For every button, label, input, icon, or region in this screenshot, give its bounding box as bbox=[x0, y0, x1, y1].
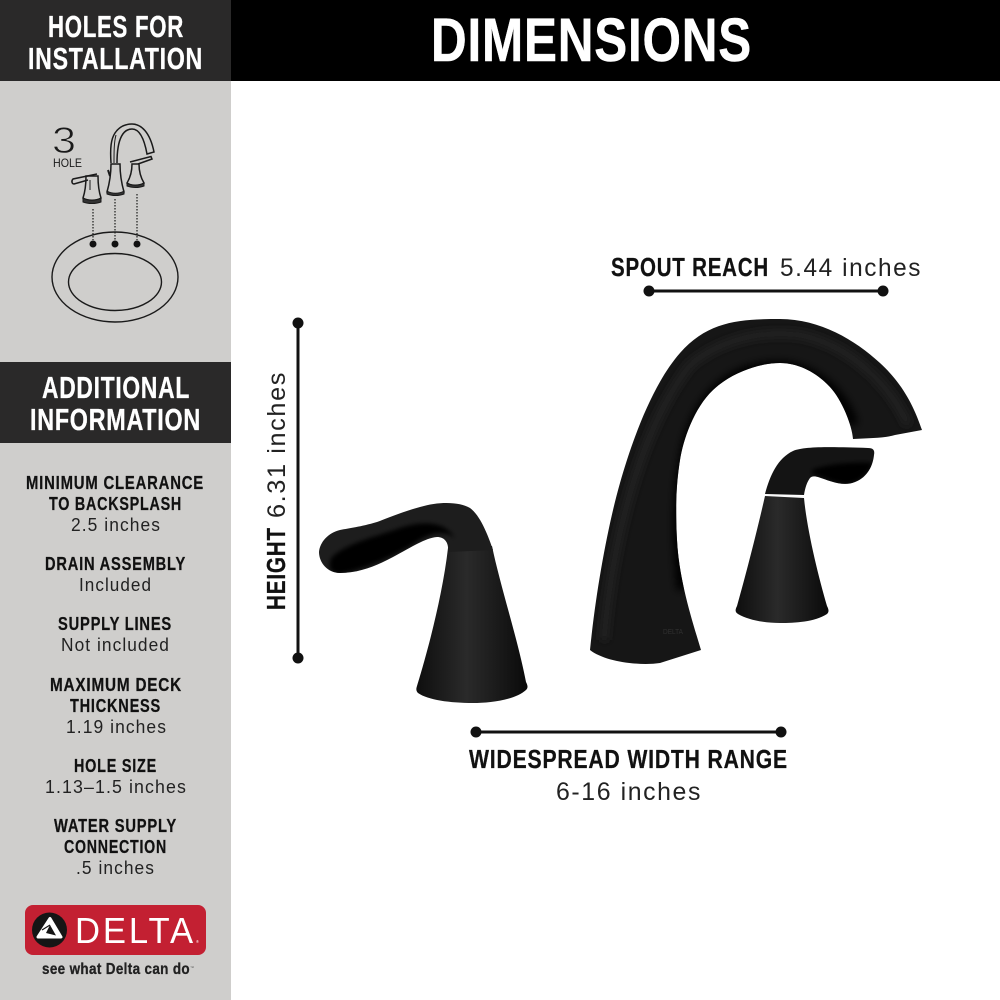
dimension: widespread width range bbox=[469, 726, 788, 806]
faucet: spout bbox=[590, 319, 922, 664]
dimension: widespread width range: 6-16 inches bbox=[556, 778, 702, 806]
title banner bbox=[231, 0, 1000, 81]
logo: Delta: see what Delta can do bbox=[42, 961, 190, 978]
additional information heading: ADDITIONAL bbox=[42, 370, 190, 405]
faucet: right handle bbox=[736, 447, 874, 623]
spec: water supply connection: .5 inches bbox=[76, 858, 155, 878]
logo: Delta: ™ bbox=[190, 965, 194, 970]
faucet: left handle bbox=[319, 503, 528, 703]
dimension: spout reach: 5.44 inches bbox=[780, 254, 922, 282]
spec: maximum deck thickness: 1.19 inches bbox=[66, 717, 167, 737]
spec: hole size: HOLE SIZE bbox=[74, 755, 157, 776]
spec: supply lines bbox=[58, 613, 172, 655]
spec: drain assembly: DRAIN ASSEMBLY bbox=[45, 553, 186, 574]
spec: hole size bbox=[45, 755, 187, 797]
dimension: height: 6.31 inches bbox=[263, 371, 291, 518]
spec: drain assembly: Included bbox=[79, 575, 152, 595]
spec: water supply connection: CONNECTION bbox=[64, 836, 167, 857]
icon: three hole sink diagram: 3 bbox=[52, 120, 76, 161]
logo: Delta: DELTA bbox=[75, 910, 196, 951]
dimension: height: HEIGHT bbox=[261, 527, 291, 610]
spec: water supply connection bbox=[54, 815, 177, 878]
icon: three hole sink diagram bbox=[52, 120, 178, 322]
dimension: height bbox=[261, 318, 304, 664]
holes heading bbox=[0, 0, 231, 81]
faucet: spout: DELTA bbox=[663, 629, 683, 636]
spec: minimum clearance bbox=[26, 472, 204, 535]
spec: maximum deck thickness bbox=[50, 674, 182, 737]
spec: hole size: 1.13–1.5 inches bbox=[45, 777, 187, 797]
sidebar panel bbox=[0, 0, 231, 1000]
holes heading: INSTALLATION bbox=[28, 41, 203, 76]
spec: supply lines: Not included bbox=[61, 635, 170, 655]
spec: minimum clearance: 2.5 inches bbox=[71, 515, 161, 535]
title banner: DIMENSIONS bbox=[431, 6, 752, 74]
dimension: spout reach bbox=[611, 252, 922, 296]
dimension: widespread width range: WIDESPREAD WIDTH RANGE bbox=[469, 744, 788, 774]
logo: Delta: ® bbox=[196, 939, 199, 944]
spec: maximum deck thickness: MAXIMUM DECK bbox=[50, 674, 182, 695]
spec: minimum clearance: MINIMUM CLEARANCE bbox=[26, 472, 204, 493]
dimension: spout reach: SPOUT REACH bbox=[611, 252, 769, 282]
spec: maximum deck thickness: THICKNESS bbox=[70, 695, 161, 716]
additional information heading: INFORMATION bbox=[30, 402, 201, 437]
additional information heading bbox=[0, 362, 231, 443]
logo: Delta bbox=[25, 905, 206, 978]
spec: minimum clearance: TO BACKSPLASH bbox=[49, 493, 182, 514]
spec: drain assembly bbox=[45, 553, 186, 595]
icon: three hole sink diagram: HOLE bbox=[53, 156, 82, 170]
spec: supply lines: SUPPLY LINES bbox=[58, 613, 172, 634]
holes heading: HOLES FOR bbox=[48, 9, 184, 44]
spec: water supply connection: WATER SUPPLY bbox=[54, 815, 177, 836]
